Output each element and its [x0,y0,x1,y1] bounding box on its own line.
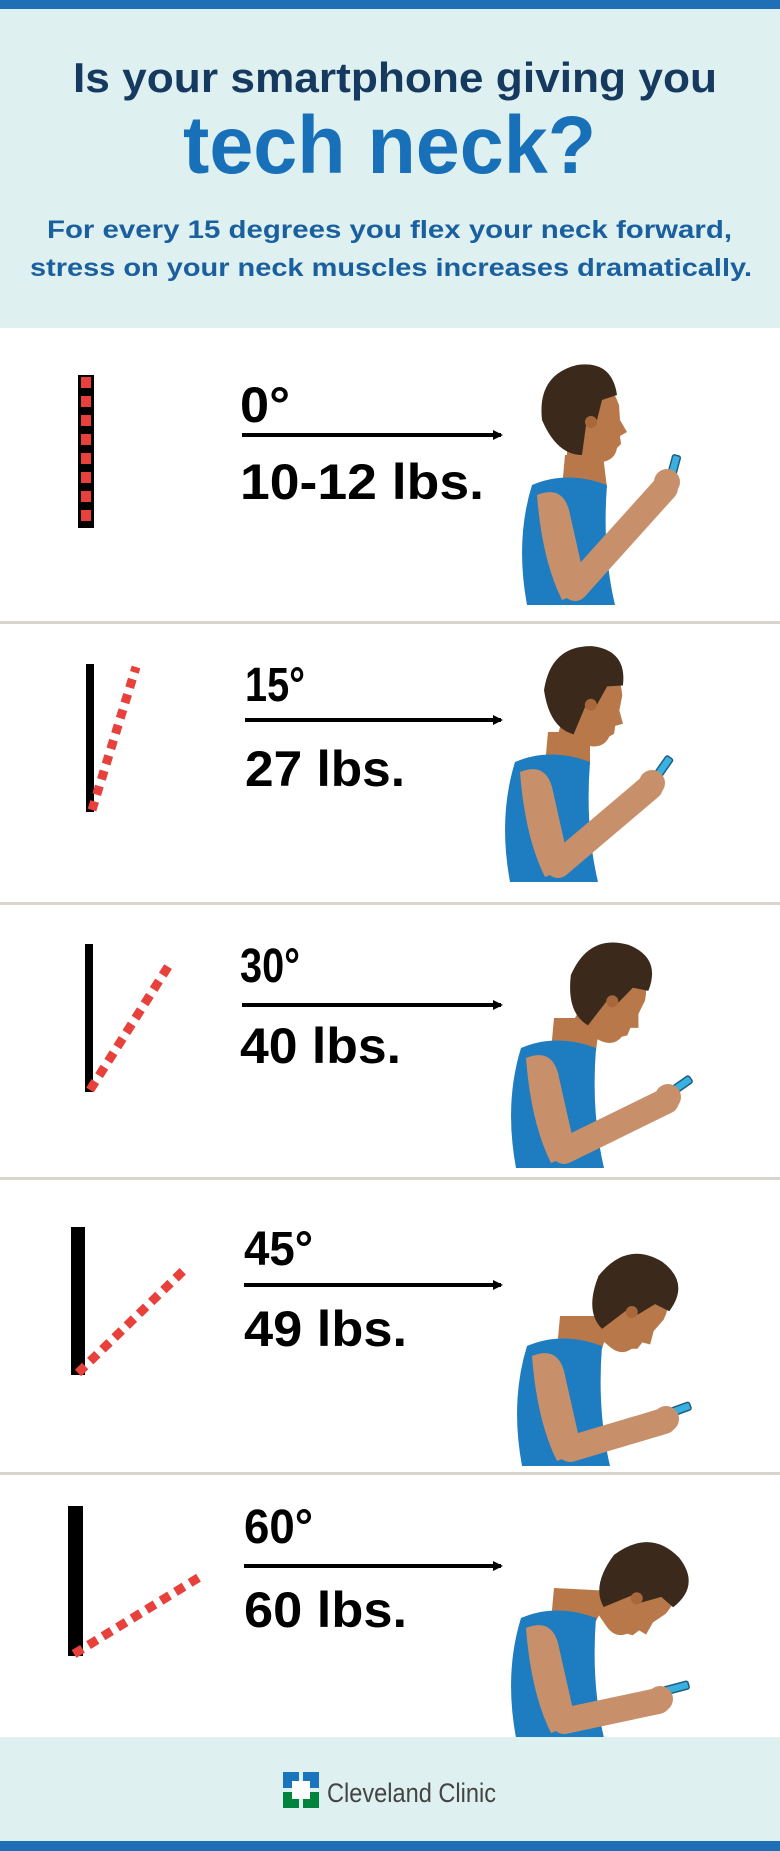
person 30 [511,927,693,1168]
subtitle [30,216,752,282]
label: weight: 27 lbs. [245,741,405,797]
label: weight: 10-12 lbs. [240,454,484,510]
label: weight: 60 lbs. [244,1582,407,1638]
icon: spine angle 30 [85,944,171,1092]
label: 30 degrees: 30° [240,940,300,993]
person 15 [505,636,673,882]
panel: 30 degrees [85,927,693,1168]
arrow [242,433,501,437]
person 60 [511,1527,705,1738]
label: 60 degrees: 60° [244,1501,313,1554]
panel: 60 degrees [68,1501,705,1738]
subtitle: For every 15 degrees you flex your neck forward, [47,216,732,244]
panel: 45 degrees [71,1223,698,1466]
icon: spine angle 60 [68,1506,203,1656]
icon: spine angle 45 [71,1227,183,1375]
person 45 [517,1236,698,1466]
panel: 0 degrees [78,364,681,605]
arrow [244,1283,501,1287]
logo: Cleveland Clinic: Cleveland Clinic [327,1778,496,1808]
label: 45 degrees: 45° [244,1223,313,1276]
header background [0,0,780,328]
subtitle: stress on your neck muscles increases dramatically. [30,254,752,282]
arrow [242,1003,501,1007]
title: Is your smartphone giving you [73,54,717,101]
label: 15 degrees: 15° [245,659,305,712]
label: weight: 49 lbs. [244,1301,407,1357]
icon: spine angle 0 [78,375,94,528]
title [73,54,717,191]
title: tech neck? [183,100,596,191]
label: 0 degrees: 0° [240,377,290,433]
logo: Cleveland Clinic [283,1772,496,1808]
icon: spine angle 15 [86,664,136,812]
arrow [244,1564,501,1568]
footer [0,1737,780,1851]
separators [0,621,780,624]
panel: 15 degrees [86,636,673,882]
label: weight: 40 lbs. [240,1018,401,1074]
arrow [245,718,501,722]
person 0 [522,364,681,605]
